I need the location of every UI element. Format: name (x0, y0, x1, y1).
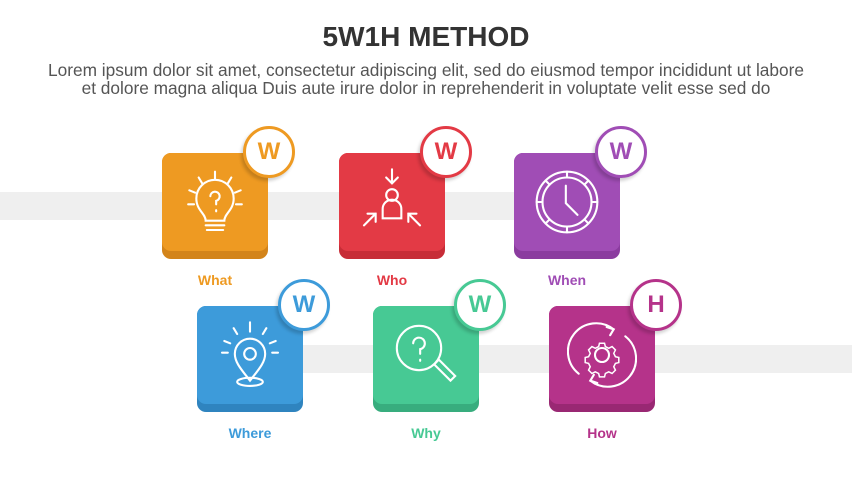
badge H (630, 279, 682, 331)
label: Where (229, 425, 271, 441)
card: Where (197, 279, 330, 441)
label: Who (377, 272, 407, 288)
title: 5W1H METHOD (323, 21, 529, 52)
label: Why (411, 425, 441, 441)
badge W: W (293, 291, 315, 318)
badge W: W (469, 291, 491, 318)
card: When (514, 126, 647, 288)
label: When (548, 272, 586, 288)
badge W: W (610, 138, 632, 165)
icon: gear cycle (567, 322, 637, 388)
card: Who (339, 126, 472, 288)
top band (0, 192, 520, 220)
badge W (595, 126, 647, 178)
badge W (278, 279, 330, 331)
card: Why (373, 279, 506, 441)
subtitle text (48, 60, 804, 98)
icon: location pin (221, 321, 279, 387)
icon: magnifier question (396, 324, 456, 382)
badge W: W (435, 138, 457, 165)
badge W (420, 126, 472, 178)
badge H: H (647, 291, 665, 318)
card: How (549, 279, 682, 441)
label: How (587, 425, 617, 441)
icon: person with arrows (362, 168, 422, 226)
icon: lightbulb (187, 170, 243, 231)
badge W (454, 279, 506, 331)
subtitle text: Lorem ipsum dolor sit amet, consectetur adipiscing elit, sed do eiusmod tempor incididunt ut labore (48, 60, 804, 80)
badge W (243, 126, 295, 178)
label: What (198, 272, 232, 288)
badge W: W (258, 138, 280, 165)
subtitle text: et dolore magna aliqua Duis aute irure dolor in reprehenderit in voluptate velit esse sed do (82, 78, 770, 98)
card: What (162, 126, 295, 288)
bottom band (300, 345, 852, 373)
icon: clock (536, 170, 598, 234)
